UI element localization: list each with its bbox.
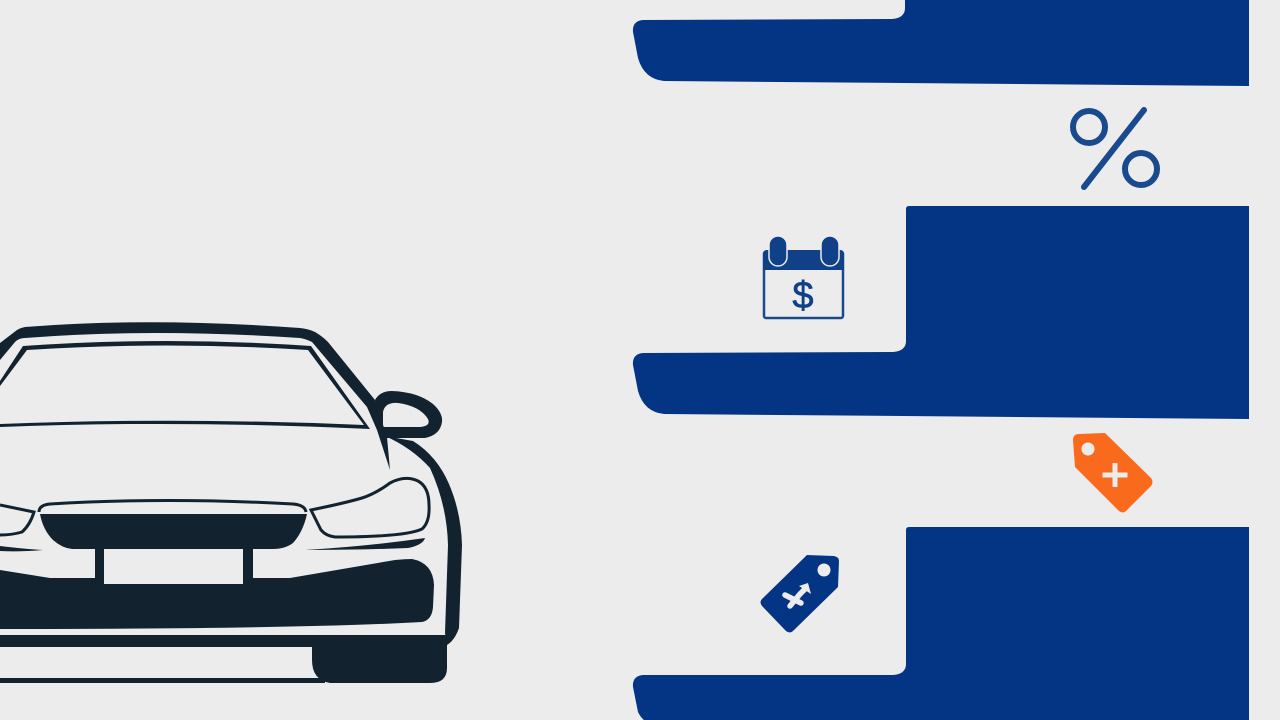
grille bbox=[40, 514, 307, 549]
icon: blue price tag bbox=[760, 555, 839, 632]
left light accent bbox=[0, 546, 43, 551]
right light accent bbox=[305, 538, 425, 550]
windshield bbox=[0, 341, 370, 429]
icon: calendar with dollar bbox=[763, 236, 844, 318]
bumper and number plate frame bbox=[0, 549, 434, 629]
side mirror bbox=[375, 391, 442, 438]
panel: middle step bbox=[633, 206, 1249, 419]
right headlight bbox=[311, 478, 429, 537]
icon: orange price tag bbox=[1073, 433, 1152, 512]
panel: top step bbox=[633, 0, 1249, 86]
icon: car front view bbox=[0, 322, 462, 683]
icon: calendar with dollar: $ bbox=[792, 275, 814, 317]
car body side bbox=[385, 436, 462, 645]
panel: bottom step bbox=[633, 527, 1249, 720]
left headlight bbox=[0, 505, 34, 535]
lower bumper bar bbox=[0, 635, 447, 647]
wheel bbox=[312, 640, 447, 683]
car roof outline bbox=[0, 322, 390, 470]
icon: percent bbox=[1073, 110, 1157, 187]
ground line bbox=[0, 678, 325, 683]
grille top line bbox=[39, 500, 306, 512]
